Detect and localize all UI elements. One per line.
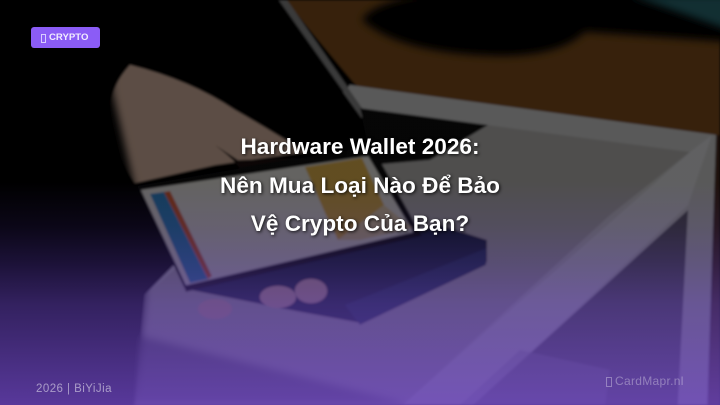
tablet edge xyxy=(279,0,362,116)
hardware wallet front xyxy=(345,248,487,325)
screen yellow card xyxy=(305,158,384,240)
badge: crypto xyxy=(31,27,100,48)
screen blue stripe xyxy=(150,192,208,283)
screen card lower xyxy=(338,205,412,240)
hardware wallet top xyxy=(190,225,487,323)
orange wooden background xyxy=(285,0,720,140)
dark blurred object xyxy=(362,0,720,56)
teal corner xyxy=(630,0,720,30)
table inner triangle xyxy=(473,210,688,405)
black left side xyxy=(0,0,145,405)
thumb shadow xyxy=(215,145,300,168)
title xyxy=(220,134,502,238)
screen orange stripe xyxy=(164,191,212,279)
table lower panel xyxy=(460,350,610,405)
hand xyxy=(111,65,305,183)
footer: date and author: 2026 | BiYiJia xyxy=(36,383,112,395)
fingers xyxy=(198,279,327,319)
badge: crypto: CRYPTO xyxy=(49,32,88,43)
photo credit: CardMapr.nl xyxy=(615,374,684,388)
table frame diagonal xyxy=(403,135,712,405)
title: Nên Mua Loại Nào Để Bảo xyxy=(220,172,500,198)
phone screen xyxy=(141,156,413,285)
title: Vệ Crypto Của Bạn? xyxy=(251,211,469,236)
title: Hardware Wallet 2026: xyxy=(240,134,480,159)
table surface xyxy=(135,85,716,405)
table inner surface xyxy=(135,108,690,405)
right dark strip xyxy=(706,135,720,405)
tablet black shape xyxy=(0,0,440,200)
table front shadow xyxy=(135,335,403,405)
phone body xyxy=(137,146,422,292)
black device on table xyxy=(360,108,488,165)
